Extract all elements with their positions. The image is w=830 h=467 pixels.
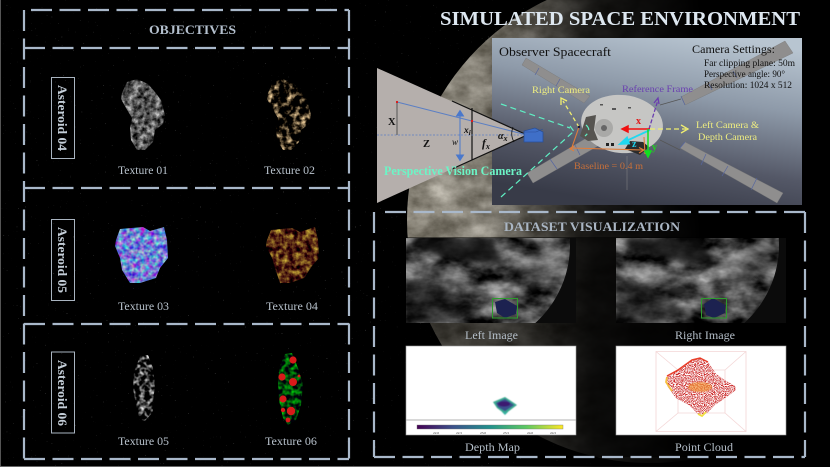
colorbar tick labels: 23.5	[503, 431, 509, 435]
diagram symbols: w	[452, 137, 458, 147]
right image	[616, 238, 786, 323]
left image	[406, 238, 576, 323]
depth map	[406, 346, 576, 435]
colorbar tick labels: 24.5	[550, 431, 556, 435]
asteroid: texture 02	[267, 79, 311, 150]
label: asteroid 06: Asteroid 06	[55, 360, 69, 426]
label: asteroid 04: Asteroid 04	[55, 85, 69, 152]
colorbar tick labels: 22.5	[456, 431, 462, 435]
label: asteroid 04	[52, 78, 74, 158]
dashed view rays	[501, 104, 589, 197]
diagram symbols: x	[485, 142, 490, 151]
depth colorbar	[417, 425, 563, 429]
arrow: left camera	[650, 125, 688, 133]
caption: texture 05: Texture 05	[118, 436, 169, 448]
panel frame: dashed border	[24, 10, 349, 459]
frustum edges and image plane	[452, 101, 527, 169]
caption: texture 06: Texture 06	[265, 436, 317, 448]
caption: left image: Left Image	[465, 330, 518, 342]
panel: perspective vision camera diagram	[377, 68, 543, 203]
title: SIMULATED SPACE ENVIRONMENT	[440, 8, 801, 30]
axis y	[645, 129, 651, 157]
angle arc	[512, 127, 514, 142]
colorbar tick labels: 24.0	[527, 431, 533, 435]
asteroid: texture 06	[278, 353, 303, 425]
label: reference frame: Reference Frame	[622, 84, 693, 95]
diagram symbols: α	[498, 131, 504, 142]
caption: texture 02: Texture 02	[264, 165, 315, 177]
diagram symbols	[388, 117, 508, 151]
caption: point cloud: Point Cloud	[675, 442, 733, 454]
arrow: right camera	[561, 98, 579, 127]
label: asteroid 05: Asteroid 05	[55, 227, 69, 293]
label: left camera and depth camera	[696, 120, 760, 143]
axis letters	[632, 116, 657, 153]
heading: dataset visualization: DATASET VISUALIZATION	[504, 220, 680, 234]
solar panels	[522, 41, 793, 203]
colorbar tick labels: 23.0	[480, 431, 486, 435]
panel: objectives	[24, 10, 349, 459]
diagram symbols: f	[482, 138, 486, 150]
label: baseline: Baseline = 0.4 m	[574, 162, 644, 172]
colorbar tick labels	[433, 431, 556, 435]
arrow: reference frame	[649, 98, 659, 129]
caption: texture 03: Texture 03	[118, 301, 169, 313]
label: left camera and depth camera: Depth Camera	[698, 133, 758, 143]
camera icon	[524, 128, 543, 142]
asteroid: texture 04	[266, 227, 319, 283]
heading: objectives: OBJECTIVES	[149, 22, 236, 37]
camera settings: Far clipping plane: 50m	[704, 58, 795, 68]
label: asteroid 05	[52, 220, 74, 300]
asteroid: texture 05	[133, 355, 155, 421]
panel background	[492, 38, 802, 205]
label: right camera: Right Camera	[532, 86, 591, 96]
axis letters: x	[636, 116, 641, 127]
camera settings	[692, 44, 795, 90]
arrow: width w	[456, 110, 464, 160]
label: left camera and depth camera: Left Camera &	[696, 120, 760, 131]
caption: texture 01: Texture 01	[118, 165, 168, 177]
optical axis and projection ray	[377, 134, 527, 136]
point cloud	[616, 346, 786, 435]
diagram symbols: Z	[423, 139, 430, 150]
caption: depth map: Depth Map	[465, 442, 520, 454]
camera settings: Camera Settings:	[692, 44, 775, 56]
object height line	[396, 102, 398, 135]
label: asteroid 06	[52, 352, 74, 433]
panel: dataset visualization	[372, 210, 806, 458]
asteroid: texture 03	[115, 227, 168, 283]
asteroid: texture 01	[121, 79, 165, 150]
caption: right image: Right Image	[675, 330, 735, 342]
spacecraft body	[578, 91, 666, 190]
diagram symbols: x	[503, 134, 508, 143]
diagram symbols: i	[469, 129, 471, 137]
baseline marker	[570, 127, 645, 154]
bounding box	[656, 352, 746, 432]
label: perspective vision camera: Perspective Vision Camera	[384, 164, 523, 178]
earth backdrop	[376, 0, 830, 467]
projection points	[396, 101, 473, 122]
axis letters: z	[632, 139, 637, 150]
cloud points	[666, 358, 736, 416]
axis letters: y	[652, 142, 657, 153]
axis x	[622, 126, 650, 132]
diagram symbols: x	[464, 126, 469, 136]
caption: texture 04: Texture 04	[266, 301, 318, 313]
panel frame: dashed border	[374, 212, 805, 457]
camera frustum	[377, 68, 527, 203]
solar panel segment lines	[535, 68, 757, 190]
depth blob	[493, 397, 517, 415]
diagram symbols: X	[388, 117, 396, 128]
panel: observer spacecraft	[492, 38, 802, 205]
heading: observer spacecraft: Observer Spacecraft	[499, 44, 611, 59]
camera settings: Perspective angle: 90°	[704, 69, 785, 79]
colorbar tick labels: 22.0	[433, 431, 439, 435]
camera settings: Resolution: 1024 x 512	[704, 80, 792, 90]
axis z	[620, 130, 650, 144]
